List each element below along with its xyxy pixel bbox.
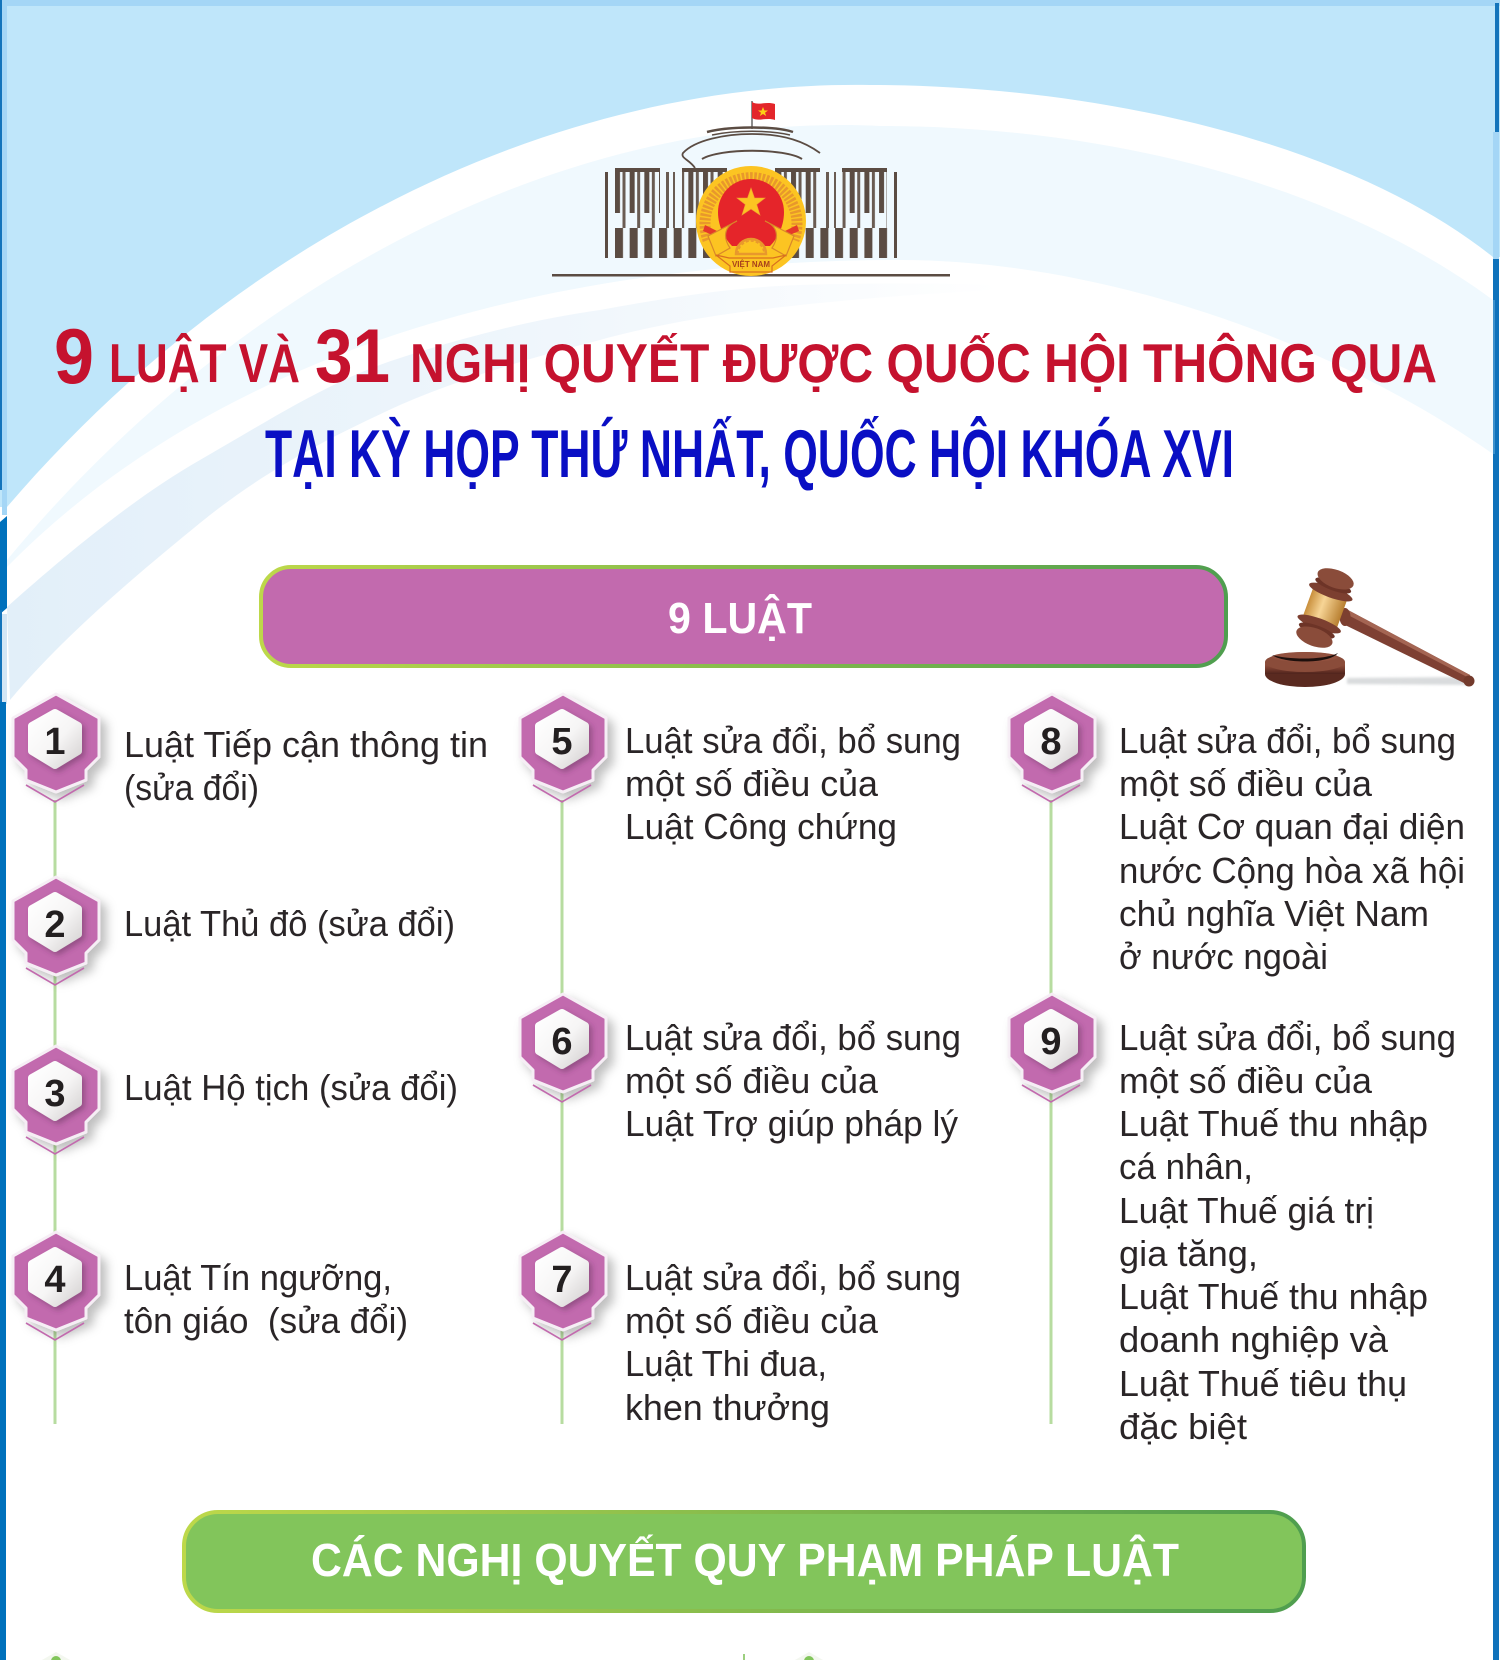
item 9: Luật Thuế thu nhập bbox=[1119, 1276, 1428, 1317]
item 7 bbox=[520, 1232, 961, 1428]
item 3: 3 bbox=[44, 1073, 66, 1115]
item 5: Luật Công chứng bbox=[625, 806, 897, 847]
item 4: tôn giáo (sửa đổi) bbox=[124, 1300, 408, 1341]
heading: các nghị quyết quy phạm pháp luật: CÁC NGHỊ QUYẾT QUY PHẠM PHÁP LUẬT bbox=[311, 1534, 1179, 1586]
item 8: một số điều của bbox=[1119, 763, 1373, 804]
icon: national emblem bbox=[696, 166, 806, 276]
item 6: 6 bbox=[551, 1021, 573, 1063]
item 8 bbox=[1009, 694, 1465, 977]
item 9: Luật Thuế tiêu thụ bbox=[1119, 1363, 1407, 1404]
item 6 bbox=[520, 994, 961, 1144]
item 2: 2 bbox=[44, 904, 66, 946]
item 2: Luật Thủ đô (sửa đổi) bbox=[124, 903, 455, 944]
item 3: Luật Hộ tịch (sửa đổi) bbox=[124, 1067, 458, 1108]
item 9: Luật Thuế thu nhập bbox=[1119, 1103, 1428, 1144]
item 8: 8 bbox=[1040, 721, 1062, 763]
item 8: Luật Cơ quan đại diện bbox=[1119, 806, 1465, 847]
item 9: một số điều của bbox=[1119, 1060, 1373, 1101]
heading: các nghị quyết quy phạm pháp luật bbox=[184, 1512, 1304, 1611]
item 7: khen thưởng bbox=[625, 1387, 830, 1428]
item 9: 9 bbox=[1040, 1021, 1062, 1063]
item 6: Luật Trợ giúp pháp lý bbox=[625, 1103, 958, 1144]
item 8: nước Cộng hòa xã hội bbox=[1119, 850, 1465, 891]
icon: national emblem: VIỆT NAM bbox=[732, 258, 770, 269]
item 1: (sửa đổi) bbox=[124, 767, 259, 808]
title line 1 bbox=[54, 312, 1437, 400]
item 1 bbox=[13, 694, 488, 808]
item 9: cá nhân, bbox=[1119, 1146, 1253, 1187]
icon: dome bbox=[682, 128, 820, 168]
item 9: gia tăng, bbox=[1119, 1233, 1258, 1274]
item 9: Luật sửa đổi, bổ sung bbox=[1119, 1017, 1456, 1058]
heading: 9 luật bbox=[261, 567, 1226, 666]
title line 1: LUẬT VÀ bbox=[109, 332, 300, 394]
item 8: Luật sửa đổi, bổ sung bbox=[1119, 720, 1456, 761]
item 2 bbox=[13, 877, 455, 985]
item 8: ở nước ngoài bbox=[1119, 936, 1328, 977]
item 9: đặc biệt bbox=[1119, 1406, 1247, 1447]
item 5: một số điều của bbox=[625, 763, 879, 804]
item 3 bbox=[13, 1046, 458, 1154]
item 9: Luật Thuế giá trị bbox=[1119, 1190, 1374, 1231]
item 9 bbox=[1009, 994, 1456, 1447]
item 6: một số điều của bbox=[625, 1060, 879, 1101]
heading: 9 luật: 9 LUẬT bbox=[668, 593, 812, 643]
item 7: một số điều của bbox=[625, 1300, 879, 1341]
item 7: 7 bbox=[551, 1259, 573, 1301]
item 7: Luật sửa đổi, bổ sung bbox=[625, 1257, 961, 1298]
item 4: Luật Tín ngưỡng, bbox=[124, 1257, 392, 1298]
item 4 bbox=[13, 1232, 408, 1341]
item 8: chủ nghĩa Việt Nam bbox=[1119, 893, 1429, 934]
icon: National Assembly building with emblem bbox=[552, 101, 950, 276]
icon: gavel bbox=[1265, 563, 1474, 687]
connector lines bbox=[55, 800, 1051, 1424]
item 5: 5 bbox=[551, 721, 573, 763]
ground line bbox=[552, 274, 950, 276]
item 6: Luật sửa đổi, bổ sung bbox=[625, 1017, 961, 1058]
item 9: doanh nghiệp và bbox=[1119, 1319, 1389, 1360]
panel: 9 luật list bbox=[13, 694, 1465, 1447]
building columns bbox=[605, 168, 897, 258]
item 5: Luật sửa đổi, bổ sung bbox=[625, 720, 961, 761]
title line 1: 31 bbox=[315, 314, 390, 399]
cropped markers of next section bbox=[42, 1652, 823, 1660]
item 1: 1 bbox=[44, 721, 66, 763]
item 7: Luật Thi đua, bbox=[625, 1343, 827, 1384]
item 1: Luật Tiếp cận thông tin bbox=[124, 724, 488, 765]
item 4: 4 bbox=[44, 1259, 66, 1301]
icon: flag bbox=[751, 101, 775, 129]
title line 1: 9 bbox=[54, 312, 94, 400]
item 5 bbox=[520, 694, 961, 847]
